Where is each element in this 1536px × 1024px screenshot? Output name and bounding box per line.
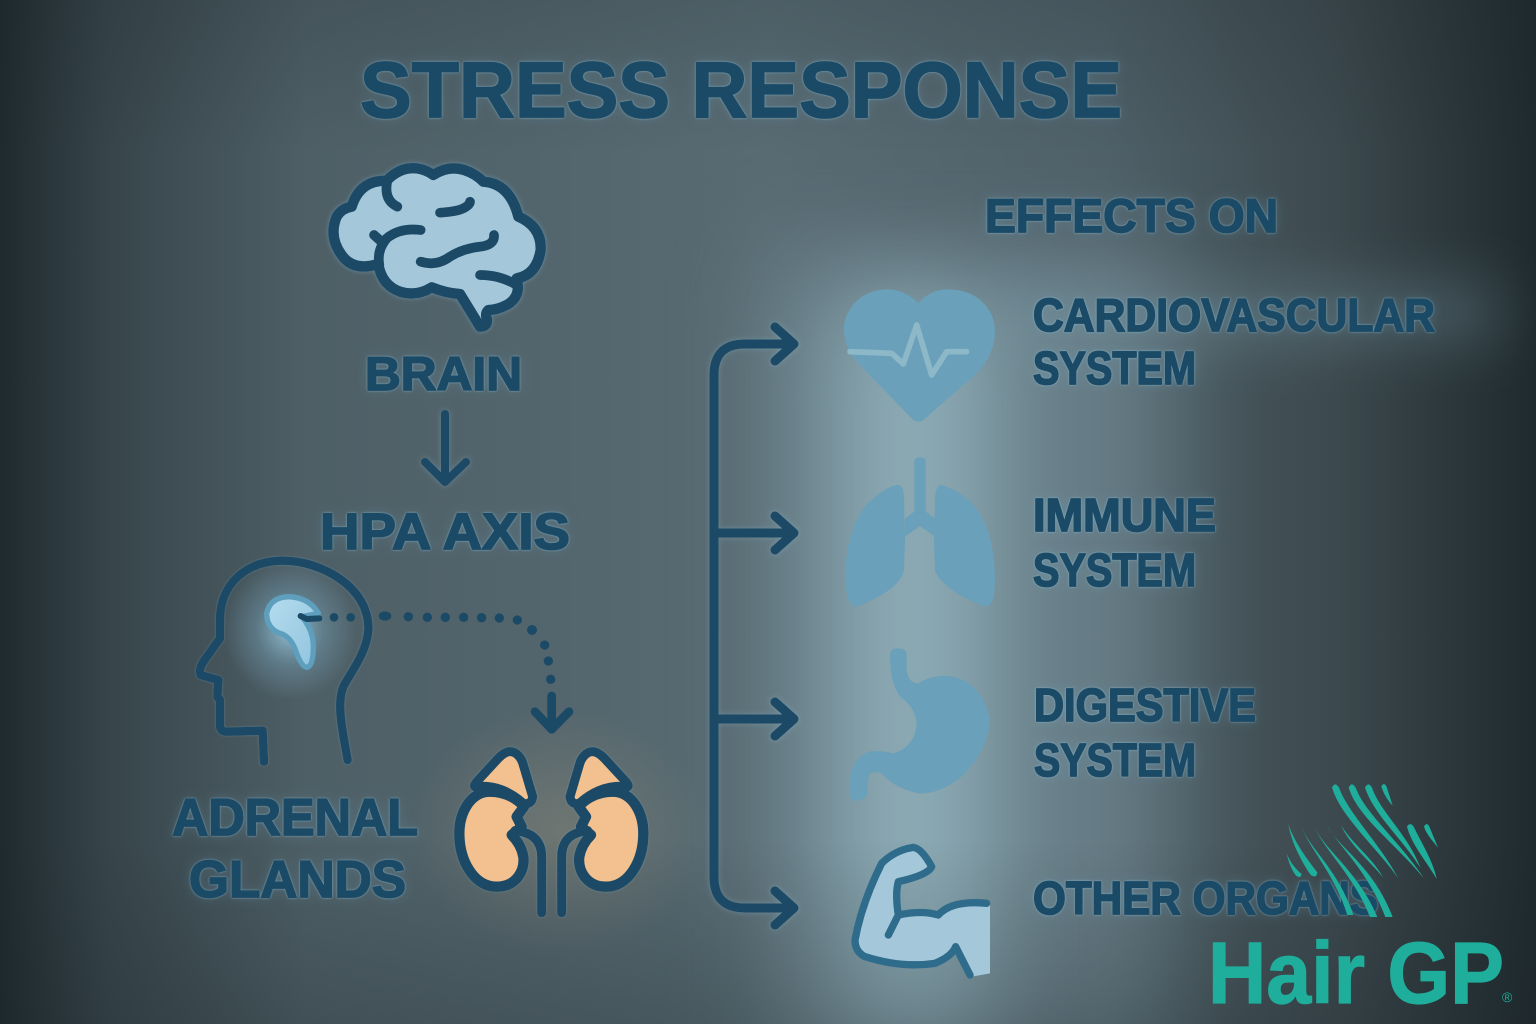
label: cardiovascular system (1033, 289, 1435, 394)
icon: stomach (849, 648, 990, 801)
left kidney (459, 752, 542, 913)
label: digestive system: SYSTEM (1034, 734, 1196, 786)
label: adrenal glands: ADRENAL (172, 789, 418, 847)
pituitary gland (267, 597, 318, 667)
icon: head with pituitary (200, 560, 368, 762)
label: HPA axis: HPA AXIS (320, 503, 570, 560)
logo wordmark: Hair GP (1208, 925, 1504, 1022)
icon: heart (844, 289, 995, 422)
label: digestive system (1034, 679, 1256, 786)
label: cardiovascular system: CARDIOVASCULAR (1033, 289, 1435, 341)
registered mark: ® (1502, 989, 1513, 1005)
head outline (200, 561, 368, 762)
label: immune system: SYSTEM (1033, 544, 1196, 596)
arrow: brain to HPA axis (425, 414, 466, 482)
label: adrenal glands (172, 789, 418, 909)
label: adrenal glands: GLANDS (189, 851, 406, 909)
heading: effects on: EFFECTS ON (985, 189, 1278, 242)
branching arrows (714, 327, 794, 925)
label: digestive system: DIGESTIVE (1034, 679, 1256, 731)
title: STRESS RESPONSE (360, 45, 1122, 134)
icon: kidneys and adrenal glands (459, 752, 643, 913)
label: brain: BRAIN (365, 347, 522, 400)
icon: muscle arm (855, 847, 990, 977)
dotted arrow: pituitary to adrenal glands (301, 611, 569, 729)
label: immune system (1033, 489, 1216, 596)
label: cardiovascular system: SYSTEM (1033, 342, 1196, 394)
logo: Hair GP (1208, 784, 1513, 1022)
glow: pituitary (223, 560, 357, 700)
label: immune system: IMMUNE (1033, 489, 1216, 541)
icon: brain (333, 168, 541, 327)
label: other organs: OTHER ORGANS (1033, 872, 1378, 924)
icon: lungs (845, 457, 995, 607)
logo mark: hair strands (1287, 784, 1438, 917)
right kidney (562, 752, 643, 913)
